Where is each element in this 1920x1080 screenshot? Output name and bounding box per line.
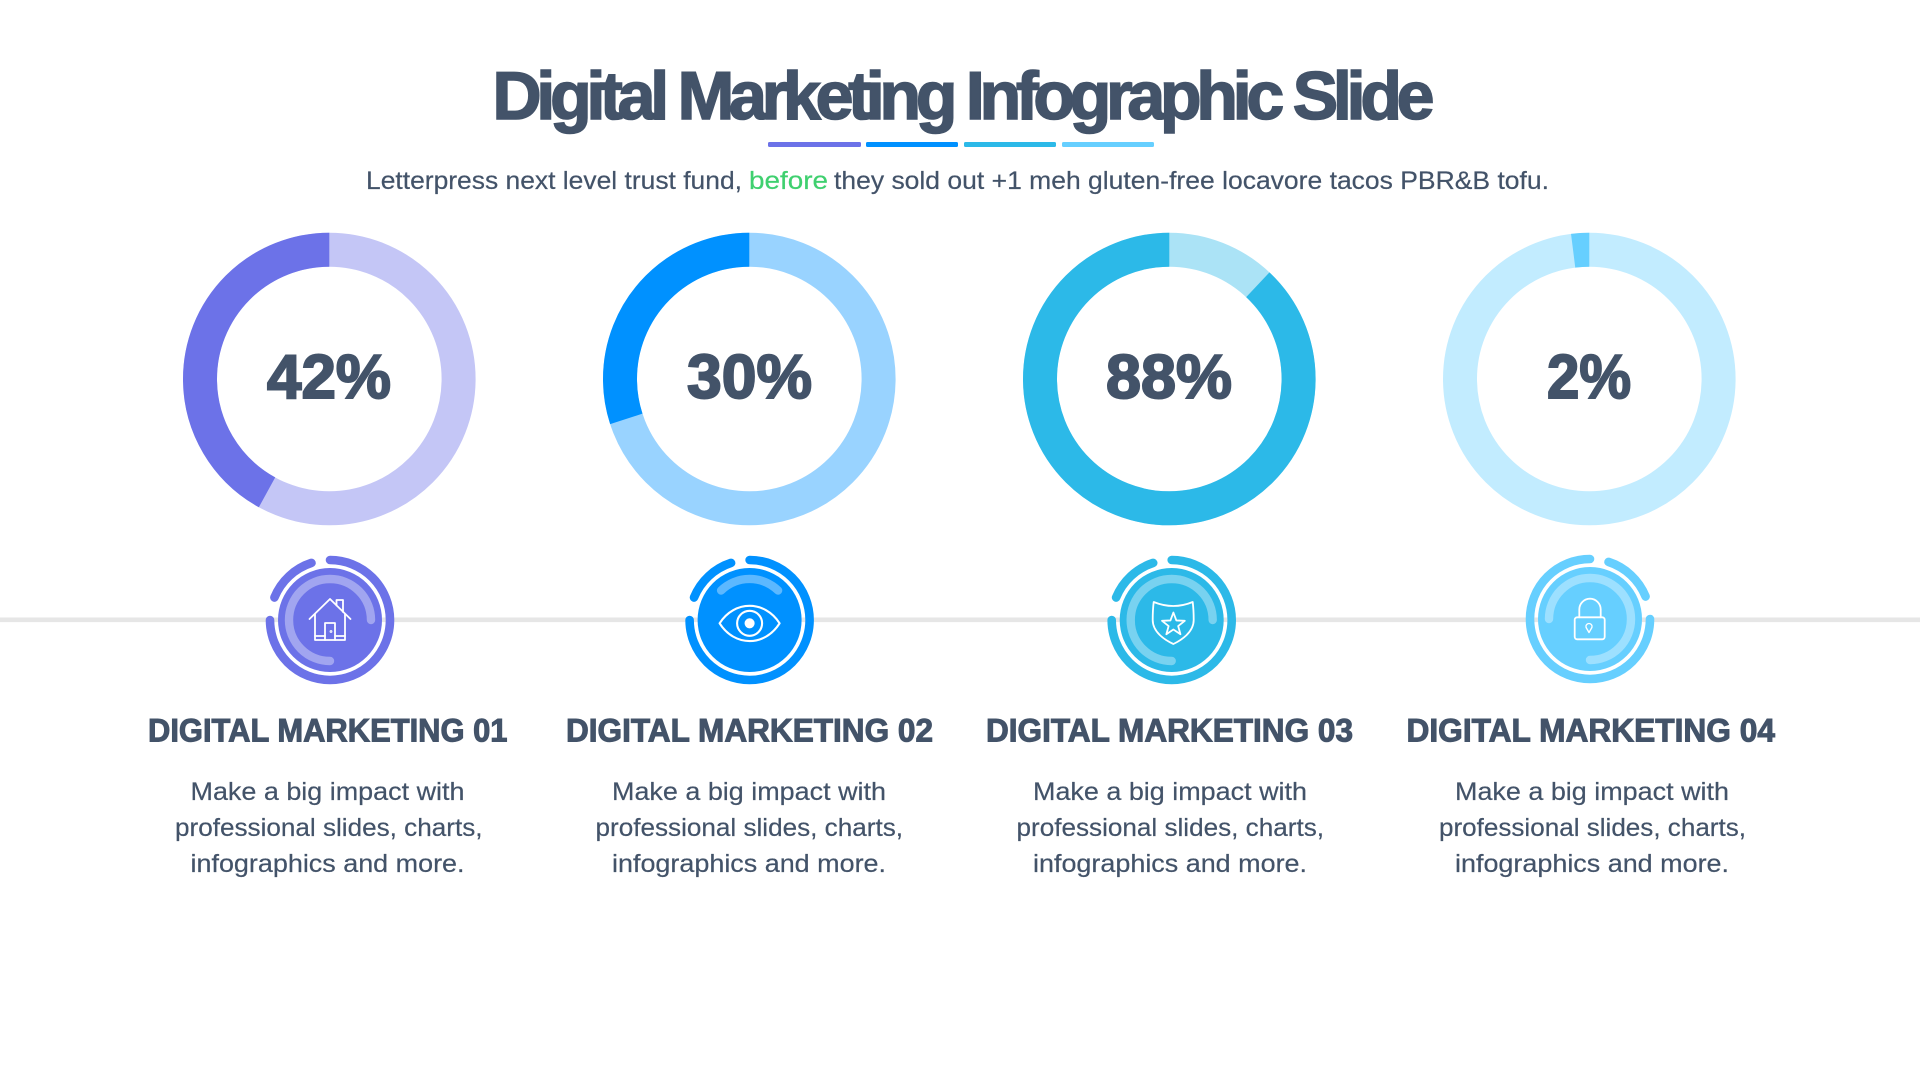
column 1 description: infographics and more. [190, 850, 464, 878]
column 1 heading: DIGITAL MARKETING 01 [148, 712, 508, 748]
column 2 description: Make a big impact with [612, 778, 886, 806]
donut chart 42%: 42% [267, 343, 391, 412]
column 3 description: Make a big impact with [1033, 778, 1307, 806]
donut chart 30% [620, 250, 879, 508]
subtitle: they sold out +1 meh gluten-free locavore tacos PBR&B tofu. [834, 167, 1549, 195]
donut chart 88%: 88% [1106, 343, 1232, 412]
column 4 description [1439, 778, 1746, 878]
title: Digital Marketing Infographic Slide [492, 58, 1434, 134]
icon: shield with star [1112, 560, 1232, 680]
icon: eye [690, 560, 810, 680]
donut chart 42% [200, 250, 459, 508]
icon: house [270, 560, 390, 680]
column 1 description [175, 778, 482, 878]
column 4 description: Make a big impact with [1455, 778, 1729, 806]
donut chart 2%: 2% [1547, 343, 1631, 412]
column 2 description: infographics and more. [612, 850, 886, 878]
donut chart 30%: 30% [687, 343, 812, 412]
column 2 description: professional slides, charts, [596, 814, 903, 842]
subtitle: Letterpress next level trust fund, [366, 167, 742, 195]
column 3 description: infographics and more. [1033, 850, 1307, 878]
donut chart 88% [1040, 250, 1299, 508]
donut chart 2% [1460, 250, 1719, 508]
subtitle: before [749, 167, 828, 195]
column 3 description [1016, 778, 1324, 878]
column 3 description: professional slides, charts, [1016, 814, 1324, 842]
column 4 heading: DIGITAL MARKETING 04 [1406, 712, 1775, 748]
column 1 description: Make a big impact with [190, 778, 464, 806]
column 3 heading: DIGITAL MARKETING 03 [986, 712, 1353, 748]
column 2 heading: DIGITAL MARKETING 02 [566, 712, 933, 748]
column 4 description: professional slides, charts, [1439, 814, 1746, 842]
timeline line [0, 618, 1920, 622]
subtitle [366, 167, 1549, 195]
title underline bars [768, 142, 1154, 147]
column 4 description: infographics and more. [1455, 850, 1729, 878]
column 1 description: professional slides, charts, [175, 814, 482, 842]
column 2 description [596, 778, 903, 878]
icon: padlock [1530, 559, 1650, 679]
